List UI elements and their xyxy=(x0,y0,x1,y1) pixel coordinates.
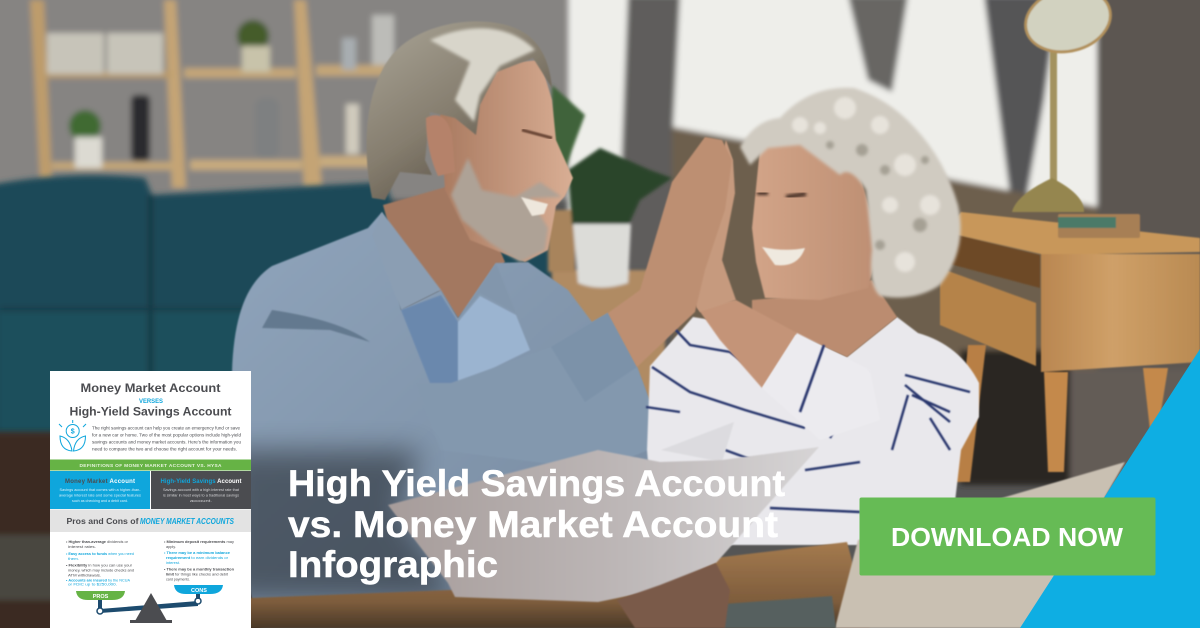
woman's arm xyxy=(696,300,797,388)
download button: DOWNLOAD NOW xyxy=(891,522,1123,552)
smile xyxy=(521,197,548,216)
headline: vs. Money Market Account xyxy=(288,504,778,545)
preview intro text: savings accounts and money market accounts. Here's the information you xyxy=(92,440,241,445)
cons list xyxy=(164,539,235,582)
pros list: • Higher than-average dividends or xyxy=(66,539,129,544)
panel: money market account: Money Market Account xyxy=(65,479,135,485)
pros list: money, which may include checks and xyxy=(68,568,134,572)
pros pan: PROS xyxy=(93,594,109,600)
panel: high-yield savings account: High-Yield Savings Account xyxy=(160,479,242,485)
man's face xyxy=(440,60,573,262)
woman's shirt xyxy=(647,317,979,545)
headline xyxy=(288,463,785,585)
definitions bar xyxy=(50,460,251,470)
panel: high-yield savings account: is similar in most ways to a traditional savings xyxy=(163,492,239,498)
woman's face xyxy=(752,139,880,300)
left collar xyxy=(372,212,441,310)
download button xyxy=(860,498,1156,576)
woman xyxy=(646,88,979,545)
panel: money market account: such as checking and a debit card. xyxy=(72,498,128,503)
preview title: VERSES xyxy=(139,398,163,405)
pros and cons heading xyxy=(50,510,251,532)
headline: Infographic xyxy=(288,544,498,585)
shirt details xyxy=(262,212,665,470)
infographic preview xyxy=(50,371,251,628)
hand holding papers xyxy=(617,563,730,628)
forearm sleeve xyxy=(416,313,665,470)
hair dark curls xyxy=(826,141,929,250)
cons list: limit for things like checks and debit xyxy=(166,572,229,576)
left wall and shelving xyxy=(0,0,580,200)
icon: money plant xyxy=(59,420,86,451)
pros list xyxy=(66,539,134,586)
panel: high-yield savings account: Savings account with a high interest rate that xyxy=(163,487,240,492)
back sheet of paper xyxy=(661,422,734,462)
pros and cons heading: Pros and Cons of xyxy=(66,516,139,526)
white hair highlight xyxy=(430,28,535,122)
house plants and side table xyxy=(548,85,672,420)
sofa xyxy=(0,175,552,435)
preview title: High-Yield Savings Account xyxy=(70,404,232,418)
cons pan: CONS xyxy=(191,588,207,594)
woman's sleeve xyxy=(762,333,880,440)
cons list: card payments. xyxy=(166,576,190,582)
panel: money market account xyxy=(50,471,150,509)
panel: high-yield savings account: account. xyxy=(190,498,212,503)
panel: money market account: Savings account that comes with a higher-than- xyxy=(60,487,141,492)
headline: High Yield Savings Account xyxy=(288,463,785,504)
balance scale xyxy=(76,585,223,623)
woman's eyes xyxy=(757,193,806,197)
pros pan xyxy=(76,591,125,600)
grey desk shadow xyxy=(724,596,836,628)
pros list: • Easy access to funds when you need xyxy=(66,551,134,556)
pros list: interest rates. xyxy=(68,544,96,549)
laptop xyxy=(835,462,1125,628)
navy stripes xyxy=(646,328,970,512)
man's ear xyxy=(426,115,455,176)
icon: money plant: $ xyxy=(71,428,75,436)
man's hair xyxy=(367,21,552,200)
man's shirt xyxy=(232,212,665,600)
cons list: • Minimum deposit requirements may xyxy=(164,539,234,544)
woman's neck and chest xyxy=(752,280,897,357)
preview intro text: The right savings account can help you create an emergency fund or save xyxy=(92,426,240,430)
woman's hair xyxy=(740,88,961,298)
preview title xyxy=(70,381,232,418)
cons list: • There may be a minimum balance xyxy=(164,550,231,555)
cons list: • There may be a monthly transaction xyxy=(164,566,235,572)
lamp xyxy=(1012,0,1117,212)
wooden desk xyxy=(250,542,870,628)
man's neck xyxy=(383,180,505,318)
pros list: • Accounts are insured by the NCUA xyxy=(66,578,130,582)
preview title: Money Market Account xyxy=(80,381,220,395)
panel: high-yield savings account xyxy=(151,471,251,509)
hair light curls xyxy=(792,97,940,272)
pros list: or FDIC up to $250,000. xyxy=(68,582,117,586)
cons list: apply. xyxy=(166,544,176,549)
pros and cons heading: MONEY MARKET ACCOUNTS xyxy=(140,516,234,526)
floor xyxy=(0,432,260,628)
man's eye crease xyxy=(522,130,552,138)
papers in hand xyxy=(388,447,819,602)
woman's smile xyxy=(762,247,805,265)
preview intro text xyxy=(92,426,242,452)
cons list: interest. xyxy=(166,560,180,565)
man xyxy=(232,21,665,600)
man's beard xyxy=(451,158,562,262)
cons pan xyxy=(174,585,223,594)
placket xyxy=(401,295,458,383)
right collar xyxy=(458,263,516,320)
sleeve stripe xyxy=(800,345,824,412)
blue corner triangle xyxy=(1020,349,1200,628)
pros list: them. xyxy=(68,556,79,561)
man's raised hand and wrist xyxy=(608,137,732,367)
definitions bar: DEFINITIONS OF MONEY MARKET ACCOUNT VS. HYSA xyxy=(80,463,222,469)
dark shade over lower shirt xyxy=(225,450,460,600)
cons list: requirement to earn dividends or xyxy=(166,555,229,560)
pros list: • Flexibility in how you can use your xyxy=(66,562,133,568)
woman's hand xyxy=(692,140,736,312)
preview intro text: for a new car or home. Two of the most popular options include high-yield xyxy=(92,433,242,438)
windows and curtains xyxy=(568,0,1200,485)
panel: money market account: average interest rate and some special features xyxy=(59,492,141,498)
preview intro text: need to compare the two and choose the right account for your needs. xyxy=(92,446,237,452)
wooden console table xyxy=(940,212,1200,482)
pros list: ATM withdrawals. xyxy=(68,572,101,578)
